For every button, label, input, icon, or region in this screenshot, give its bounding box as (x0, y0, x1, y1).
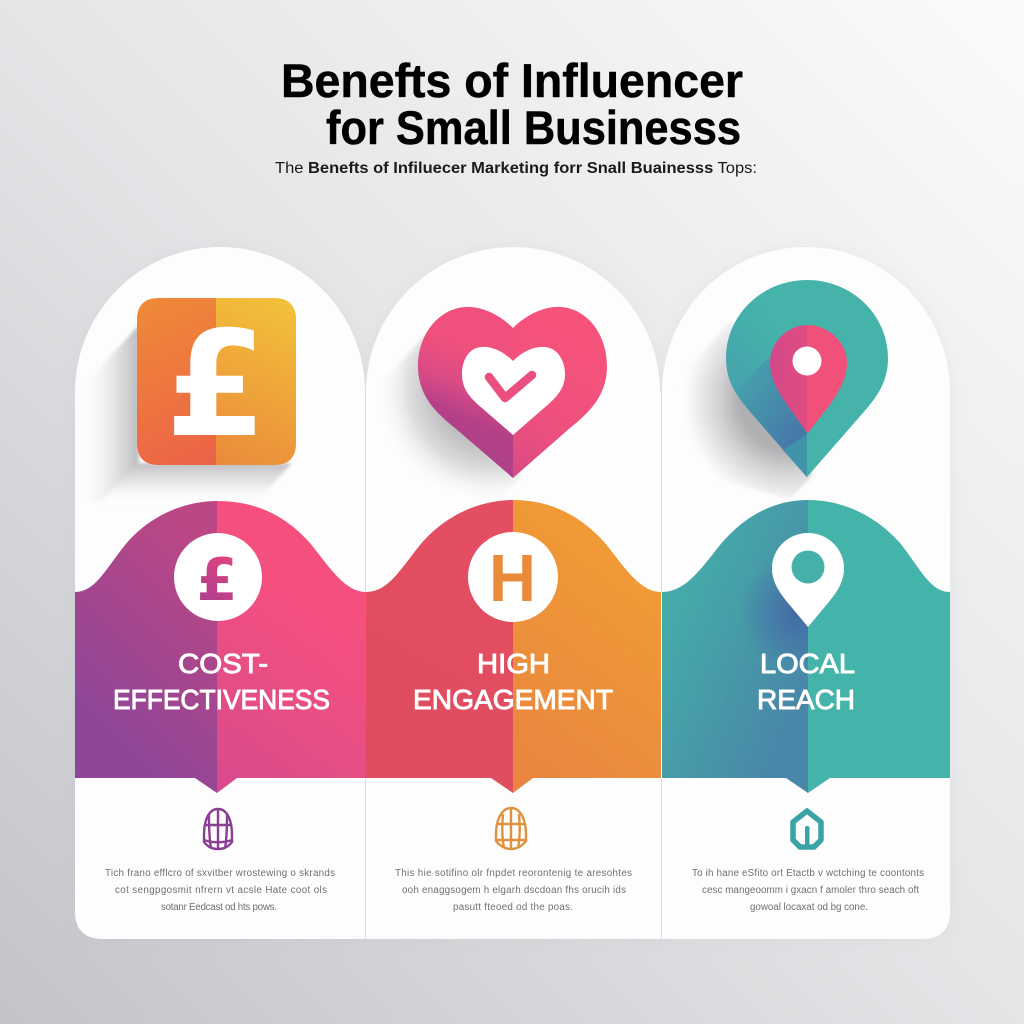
icon: heart with check (378, 307, 607, 502)
title: for Small Businesss (326, 101, 741, 154)
description: local reach: cesc mangeoomm i gxacn f amoler thro seach oft (702, 885, 919, 896)
icon: H circle: H (489, 541, 536, 616)
icon: pound circle: £ (196, 545, 238, 614)
icon: pound tile: £ (165, 300, 267, 470)
description: high engagement: pasutt fteoed od the poas. (453, 902, 573, 913)
icon: pound circle (174, 533, 262, 621)
description: local reach: To ih hane eSfito ort Etactb v wctching te coontonts (692, 868, 924, 879)
panel: local reach (662, 280, 950, 913)
colour band: local reach (662, 500, 950, 793)
icon: pound tile (80, 298, 296, 503)
subtitle: The Benefts of Infiluecer Marketing forr Snall Buainesss Tops: (275, 160, 757, 177)
title: Benefts of Influencer (281, 54, 743, 107)
description: cost-effectiveness: Tich frano efflcro of sxvitber wrostewing o skrands (105, 868, 335, 879)
description: local reach: gowoal locaxat od bg cone. (750, 902, 868, 913)
colour band: high engagement (366, 500, 661, 793)
icon: H circle (468, 532, 558, 622)
description: high engagement (395, 868, 632, 913)
heading: high engagement: ENGAGEMENT (413, 684, 613, 715)
description: cost-effectiveness: cot sengpgosmit nfrern vt acsle Hate coot ols (115, 885, 327, 896)
icon: teal house (793, 811, 821, 847)
heading: local reach: REACH (757, 684, 855, 715)
card backing (75, 247, 950, 939)
description: local reach (692, 868, 924, 913)
heading: high engagement: HIGH (477, 648, 550, 679)
heading: cost-effectiveness: COST- (178, 648, 268, 679)
heading: high engagement (413, 648, 613, 715)
title (281, 54, 743, 154)
heading: local reach (757, 648, 855, 715)
heading: local reach: LOCAL (760, 648, 855, 679)
icon: map pin (682, 280, 888, 499)
description: high engagement: ooh enaggsogem h elgarh dscdoan fhs orucih ids (402, 885, 626, 896)
panel: high engagement (366, 307, 661, 913)
icon: purple globe cage (204, 809, 232, 849)
description: high engagement: This hie sotifino olr fnpdet reorontenig te aresohtes (395, 868, 632, 879)
panel: cost-effectiveness (75, 298, 366, 913)
icon: orange globe cage (496, 808, 526, 849)
heading: cost-effectiveness (113, 648, 330, 715)
icon: white pin (772, 533, 844, 627)
description: cost-effectiveness (105, 868, 335, 913)
description: cost-effectiveness: sotanr Eedcast od hts pows. (161, 902, 277, 913)
heading: cost-effectiveness: EFFECTIVENESS (113, 684, 330, 715)
colour band: cost-effectiveness (75, 501, 366, 793)
